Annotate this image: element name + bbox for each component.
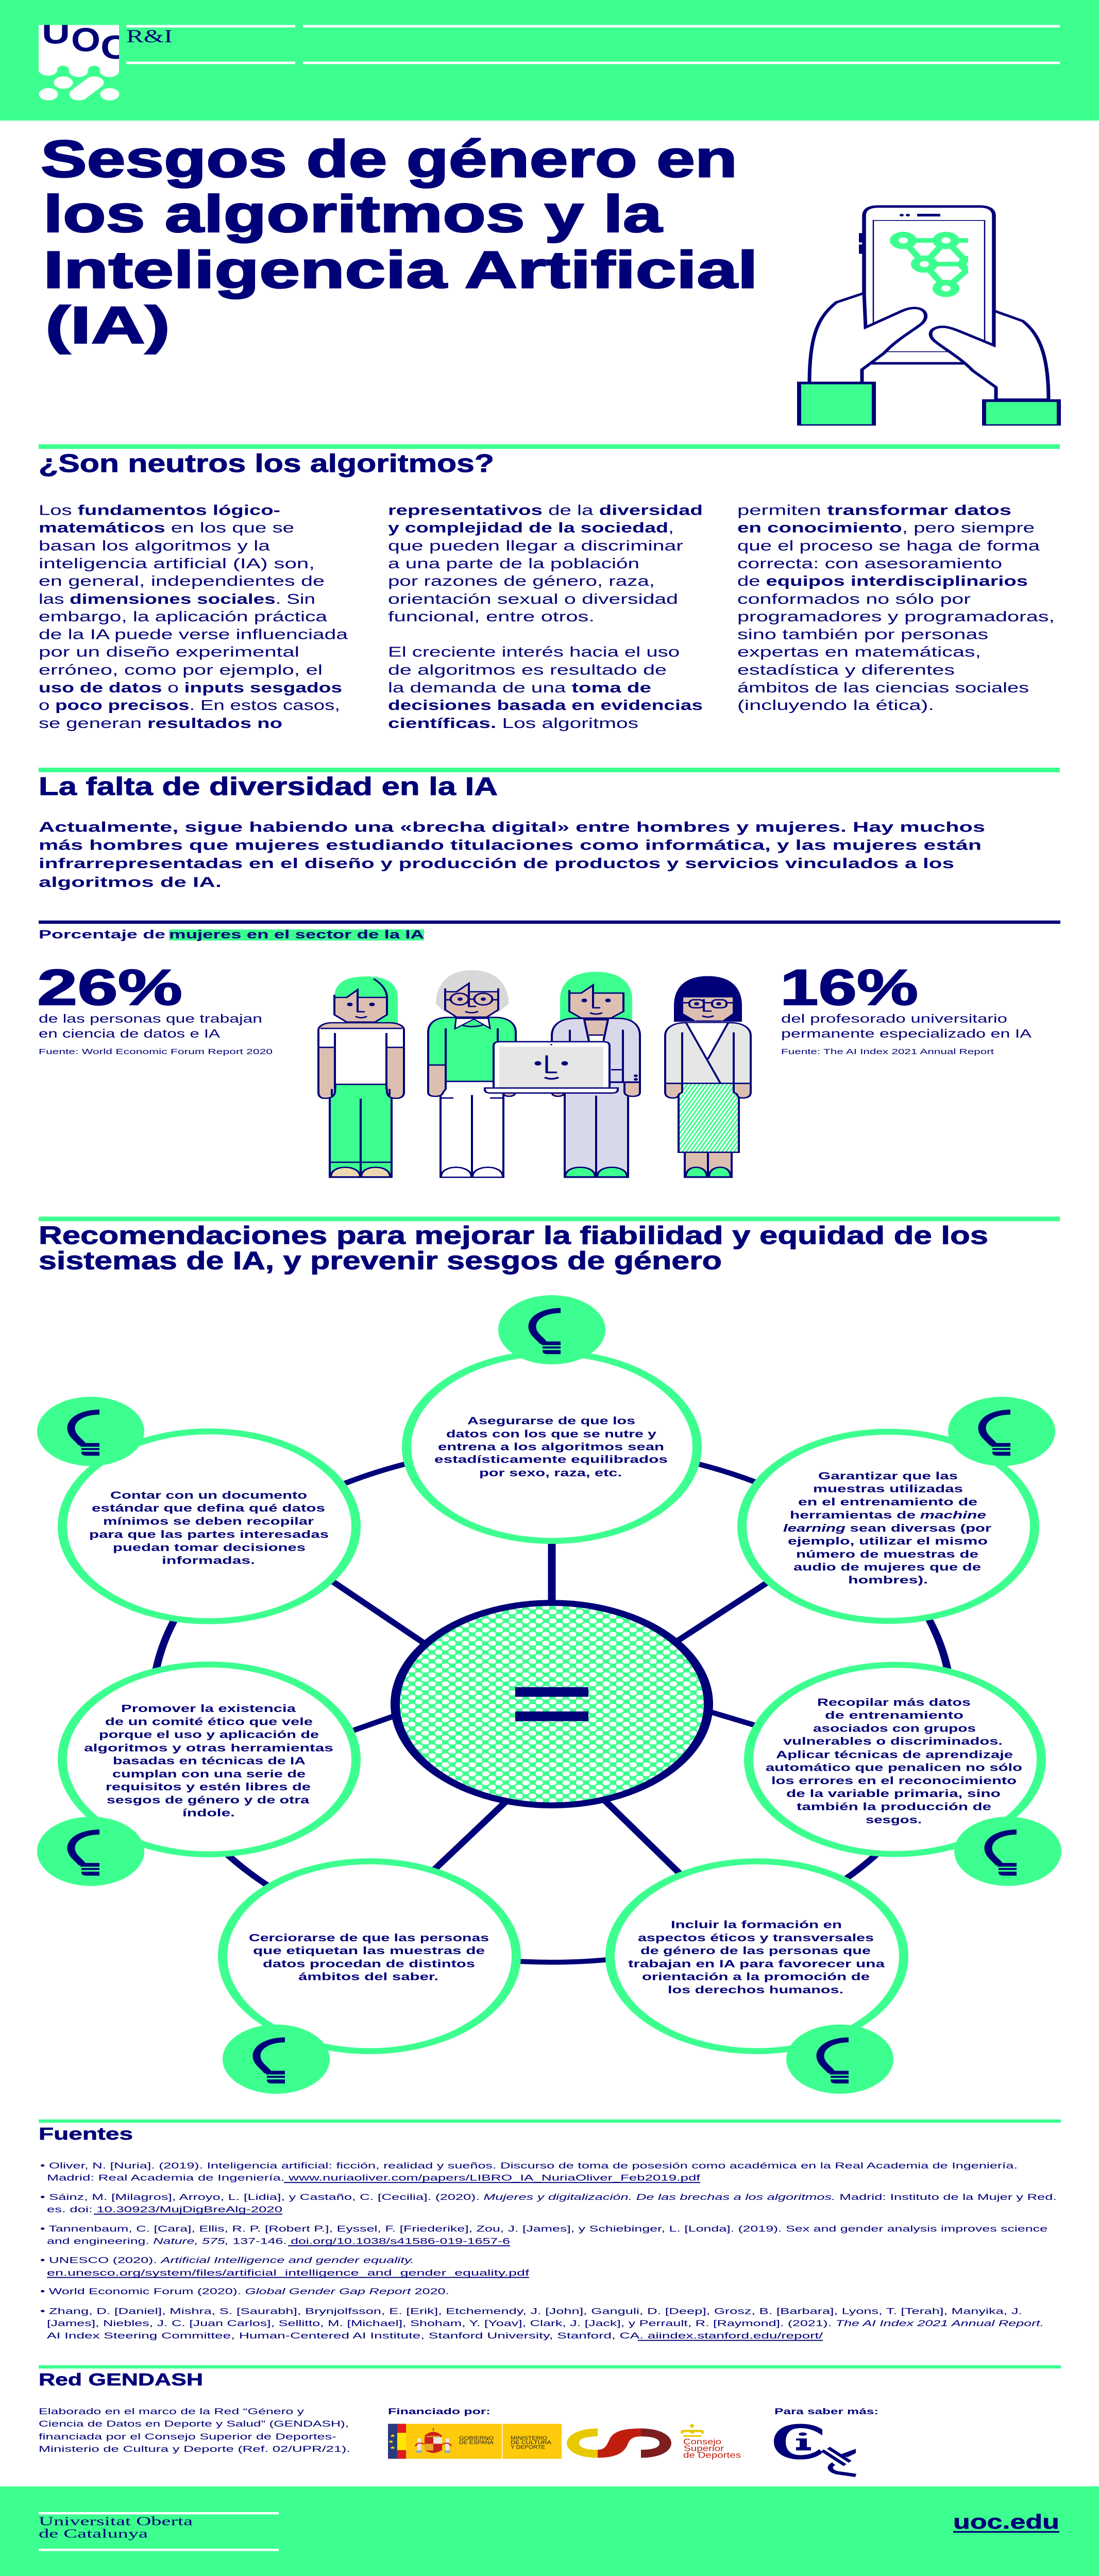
node: lower right: los errores en el reconocimiento [771, 1774, 1017, 1786]
subsection: porcentaje de mujeres: Porcentaje de [39, 928, 165, 941]
node: bottom right: orientación a la promoción de [642, 1971, 870, 1982]
lead paragraph [39, 819, 985, 890]
stat: 26% [37, 959, 273, 1056]
node: upper right: ejemplo, utilizar el mismo [788, 1535, 988, 1547]
description text: Ministerio de Cultura y Deporte (Ref. 02/UPR/21). [39, 2444, 350, 2454]
text column 3: en conocimiento, pero siempre [737, 519, 1035, 536]
text column 2: de algoritmos es resultado de [388, 662, 667, 678]
node: upper right: hombres). [848, 1574, 928, 1586]
text column 1 [39, 502, 348, 731]
node: upper left [62, 1431, 356, 1621]
text column 3: sino también por personas [737, 626, 988, 642]
footer rules [39, 2512, 279, 2551]
text column 1: de la IA puede verse influenciada [39, 626, 348, 642]
text column 3: permiten transformar datos [737, 502, 1011, 518]
logo: gobierno de españa: GOBIERNO [459, 2435, 494, 2441]
text column 3: expertas en matemáticas, [737, 643, 981, 660]
cuffs [799, 383, 874, 426]
node: upper right: muestras utilizadas [813, 1483, 963, 1495]
text column 3: programadores y programadoras, [737, 608, 1055, 624]
text column 1: las dimensiones sociales. Sin [39, 591, 315, 607]
node: lower right: de la variable primaria, sino [786, 1788, 1001, 1800]
description text: Ciencia de Datos en Deporte y Salud” (GENDASH), [39, 2418, 349, 2429]
node: lower right: también la producción de [797, 1801, 991, 1812]
node: upper right: audio de mujeres que de [793, 1561, 981, 1573]
reference list: es. doi: 10.30923/MujDigBreAlg-2020 [47, 2205, 282, 2214]
text column 1: o poco precisos. En estos casos, [39, 697, 340, 713]
subsection: porcentaje de mujeres [39, 921, 1060, 941]
reference list: • Tannenbaum, C. [Cara], Ellis, R. P. [Robert P.], Eyssel, F. [Friederike], Zou, J. [James], y Schiebinger, L. [Londa]. (2019). Sex and gender analysis improves science [40, 2225, 1047, 2233]
section: recomendaciones heading: sistemas de IA, y prevenir sesgos de género [39, 1246, 722, 1275]
logo: consejo superior de deportes: Superior [684, 2445, 724, 2453]
node: upper left: Contar con un documento [110, 1489, 307, 1501]
side buttons [859, 233, 865, 254]
node: bottom left [223, 1861, 516, 2051]
stat: 16%: Fuente: The AI Index 2021 Annual Report [781, 1047, 994, 1056]
icon: info search [774, 2424, 856, 2476]
node: bottom right: los derechos humanos. [668, 1984, 843, 1995]
stat: 26%: 26% [37, 959, 182, 1016]
node: upper right: en el entrenamiento de [798, 1496, 977, 1507]
node: bottom right: trabajan en IA para favorecer una [628, 1958, 885, 1970]
lead paragraph: infrarrepresentadas en el diseño y producción de productos y servicios vinculados a los [39, 855, 954, 871]
node: upper left: estándar que defina qué datos [92, 1502, 325, 1514]
node: lower left [62, 1665, 356, 1854]
stat: 16%: permanente especializado en IA [781, 1027, 1032, 1041]
text column 2: representativos de la diversidad [388, 502, 703, 518]
reference list: [James], Niebles, J. C. [Juan Carlos], Sellitto, M. [Michael], Shoham, Y. [Yoav], Clark, J. [Jack], y Perrault, R. [Raymond]. (2021). The AI Index 2021 Annual Report. [47, 2319, 1044, 2328]
header band [0, 0, 1099, 121]
website link: uoc.edu [953, 2511, 1059, 2533]
node: bottom left: datos procedan de distintos [263, 1958, 475, 1970]
heading: Fuentes [39, 2124, 133, 2144]
icon: bulb lower left [37, 1817, 144, 1886]
node: top: datos con los que se nutre y [446, 1428, 656, 1440]
person 4 [665, 976, 751, 1177]
central circle with equal sign [395, 1603, 708, 1805]
lead paragraph: algoritmos de IA. [39, 874, 222, 890]
person 3 [552, 972, 640, 1177]
node: lower left: de un comité ético que vele [105, 1716, 313, 1727]
description text [39, 2406, 350, 2454]
node: lower left: índole. [182, 1807, 235, 1819]
text column 2 [388, 502, 703, 731]
node: lower left: algoritmos y otras herramientas [84, 1742, 333, 1754]
coat of arms [415, 2428, 451, 2453]
right hand [931, 311, 1049, 400]
logo: consejo superior de deportes: Consejo [683, 2438, 721, 2447]
title: (IA) [45, 296, 170, 354]
title: Inteligencia Artificial [43, 241, 758, 299]
node: upper left: puedan tomar decisiones [113, 1541, 306, 1553]
UOC logo: U [42, 13, 70, 50]
node: top [407, 1353, 697, 1541]
text column 3: conformados no sólo por [737, 591, 971, 607]
text column 1: inteligencia artificial (IA) son, [39, 555, 315, 571]
reference list: • Zhang, D. [Daniel], Mishra, S. [Saurabh], Brynjolfsson, E. [Erik], Etchemendy, J. [John], Ganguli, D. [Deep], Grosz, B. [Barbara], Lyons, T. [Terah], Manyika, J. [40, 2307, 1022, 2316]
footer band [0, 2486, 1099, 2576]
reference list: Madrid: Real Academia de Ingeniería. www.nuriaoliver.com/papers/LIBRO_IA_NuriaOliver_Feb2019.pdf [47, 2174, 700, 2183]
reference list: and engineering. Nature, 575, 137-146. doi.org/10.1038/s41586-019-1657-6 [47, 2237, 510, 2246]
heading: ¿Son neutros los algoritmos? [39, 449, 494, 478]
node: upper left: para que las partes interesadas [89, 1529, 329, 1540]
text column 3: (incluyendo la ética). [737, 697, 934, 713]
university name: de Catalunya [39, 2526, 148, 2540]
node: lower right: Aplicar técnicas de aprendizaje [776, 1749, 1013, 1760]
text column 2: la demanda de una toma de [388, 680, 651, 696]
person 1 [318, 976, 404, 1177]
text column 2: a una parte de la población [388, 555, 639, 571]
node: upper left: informadas. [162, 1554, 255, 1566]
stat: 16%: 16% [780, 959, 918, 1016]
reference list: • World Economic Forum (2020). Global Gender Gap Report 2020. [40, 2287, 449, 2296]
text column 1: en general, independientes de [39, 573, 325, 589]
stat: 26%: Fuente: World Economic Forum Report 2020 [39, 1047, 273, 1056]
text column 3: estadística y diferentes [737, 662, 955, 678]
reference list: • Sáinz, M. [Milagros], Arroyo, L. [Lidia], y Castaño, C. [Cecilia]. (2020). Mujeres y digitalización. De las brechas a los algoritmos. Madrid: Instituto de la Mujer y Red. [40, 2193, 1057, 2202]
radial diagram: recommendations [37, 1295, 1061, 2094]
logo: consejo superior de deportes [567, 2424, 741, 2460]
phone body [864, 207, 994, 363]
node: lower left: requisitos y estén libres de [106, 1781, 311, 1793]
text column 2: El creciente interés hacia el uso [388, 643, 680, 660]
description text: financiada por el Consejo Superior de Deportes- [39, 2432, 336, 2442]
node: top: Asegurarse de que los [467, 1415, 635, 1427]
logo: consejo superior de deportes: de Deportes [683, 2451, 741, 2460]
node: lower right: vulnerables o discriminados. [783, 1735, 1003, 1747]
logo: gobierno de españa: MINISTERIO [511, 2435, 547, 2441]
logo: gobierno de españa [388, 2424, 562, 2459]
text column 1: por un diseño experimental [39, 643, 299, 660]
text column 1: Los fundamentos lógico- [39, 502, 280, 518]
node: bottom left: ámbitos del saber. [298, 1971, 438, 1982]
text column 1: uso de datos o inputs sesgados [39, 680, 342, 696]
university name [39, 2514, 193, 2540]
stat: 26%: de las personas que trabajan [39, 1012, 262, 1026]
reference list: • UNESCO (2020). Artificial Intelligence and gender equality. [40, 2256, 414, 2265]
section: fuentes [39, 2120, 1061, 2341]
section: falta de diversidad [39, 768, 1060, 890]
left hand [809, 293, 926, 383]
R&I label: R&I [126, 26, 173, 47]
reference list: • Oliver, N. [Nuria]. (2019). Inteligencia artificial: ficción, realidad y sueños. Discurso de toma de posesión como académica en la Real Academia de Ingeniería. [40, 2161, 1018, 2171]
section: red gendash [39, 2365, 1061, 2476]
label: financiado por: Financiado por: [388, 2406, 491, 2416]
node: lower right: Recopilar más datos [817, 1696, 971, 1708]
stat: 16%: del profesorado universitario [781, 1012, 1007, 1026]
text column 1: matemáticos en los que se [39, 519, 294, 536]
text column 3 [737, 502, 1055, 713]
UOC logo: C [100, 28, 129, 66]
spokes [319, 1532, 781, 1884]
text column 2: y complejidad de la sociedad, [388, 519, 674, 536]
logo: gobierno de españa: DE ESPAÑA [459, 2440, 494, 2445]
text column 2: orientación sexual o diversidad [388, 591, 678, 607]
lead paragraph: Actualmente, sigue habiendo una «brecha digital» entre hombres y mujeres. Hay muchos [39, 819, 985, 835]
reference list: AI Index Steering Committee, Human-Centered AI Institute, Stanford University, Stanford, CA. aiindex.stanford.edu/report/ [47, 2331, 823, 2341]
icon: bulb upper left [37, 1397, 144, 1466]
title: Sesgos de género en [41, 130, 737, 189]
text column 1: se generan resultados no [39, 715, 282, 731]
node: lower right: asociados con grupos [813, 1722, 976, 1734]
title [41, 130, 758, 354]
header rules [126, 25, 1060, 64]
node: upper left: mínimos se deben recopilar [103, 1515, 314, 1527]
node: lower left: porque el uso y aplicación de [99, 1728, 319, 1740]
reference list: en.unesco.org/system/files/artificial_intelligence_and_gender_equality.pdf [47, 2268, 529, 2278]
icon: bulb top [498, 1295, 605, 1364]
node: lower left: sesgos de género y de otra [107, 1794, 310, 1806]
section: recomendaciones heading [39, 1216, 1060, 1275]
network icon [894, 234, 980, 294]
text column 2: por razones de género, raza, [388, 573, 655, 589]
text column 2: decisiones basada en evidencias [388, 697, 703, 713]
UOC logo: O [71, 21, 100, 58]
node: bottom right: Incluir la formación en [671, 1919, 842, 1930]
icon: bulb upper right [948, 1397, 1055, 1466]
lead paragraph: más hombres que mujeres estudiando titulaciones como informática, y las mujeres están [39, 837, 982, 853]
node: lower right: sesgos. [866, 1814, 922, 1826]
node: top: por sexo, raza, etc. [479, 1467, 622, 1479]
node: upper right: número de muestras de [796, 1548, 978, 1560]
icon: bulb bottom right [786, 2025, 893, 2094]
person 2 [428, 970, 516, 1177]
icon: bulb bottom left [223, 2025, 330, 2094]
label: para saber mas: Para saber más: [774, 2406, 878, 2416]
text column 3: que el proceso se haga de forma [737, 537, 1040, 554]
logo: gobierno de españa: DE CULTURA [511, 2440, 552, 2445]
node: upper right [742, 1432, 1035, 1621]
text column 2: que pueden llegar a discriminar [388, 537, 683, 554]
node: bottom right [610, 1861, 904, 2051]
text column 3: ámbitos de las ciencias sociales [737, 680, 1029, 696]
node: lower left: basadas en técnicas de IA [113, 1755, 306, 1767]
node: lower left: cumplan con una serie de [112, 1768, 306, 1780]
stat: 16% [780, 959, 1032, 1056]
laptop [485, 1042, 618, 1093]
text column 1: basan los algoritmos y la [39, 537, 270, 554]
heading: La falta de diversidad en la IA [39, 772, 498, 801]
node: upper right: herramientas de machine [790, 1509, 986, 1521]
section: son neutros [39, 444, 1060, 731]
node: lower left: Promover la existencia [121, 1703, 296, 1715]
node: lower right [749, 1665, 1041, 1854]
text column 2: funcional, entre otros. [388, 608, 595, 624]
text column 3: correcta: con asesoramiento [737, 555, 1002, 571]
node: upper right: learning sean diversas (por [783, 1522, 992, 1534]
UOC logo [39, 25, 120, 100]
node: top: estadísticamente equilibrados [434, 1453, 668, 1465]
node: bottom left: que etiquetan las muestras de [253, 1945, 485, 1957]
node: top: entrena a los algoritmos sean [438, 1441, 664, 1453]
text column 1: erróneo, como por ejemplo, el [39, 662, 323, 678]
university name: Universitat Oberta [39, 2514, 193, 2528]
icon: hands holding phone [793, 207, 1064, 428]
title: los algoritmos y la [43, 185, 663, 243]
description text: Elaborado en el marco de la Red “Género y [39, 2406, 304, 2416]
icon: bulb lower right [954, 1817, 1061, 1886]
subsection: porcentaje de mujeres: mujeres en el sector de la IA [169, 928, 424, 941]
connecting ring [153, 1446, 951, 1962]
stat: 26%: en ciencia de datos e IA [39, 1027, 221, 1041]
node: bottom left: Cerciorarse de que las personas [249, 1932, 489, 1944]
text column 1: embargo, la aplicación práctica [39, 608, 328, 624]
logo: gobierno de españa: Y DEPORTE [511, 2445, 545, 2450]
node: bottom right: de género de las personas que [640, 1945, 871, 1957]
node: bottom right: aspectos éticos y transversales [638, 1932, 874, 1944]
node: lower right: automático que penalicen no sólo [766, 1761, 1022, 1773]
text column 2: científicas. Los algoritmos [388, 715, 638, 731]
node: lower right: de entrenamiento [825, 1709, 963, 1721]
node: upper right: Garantizar que las [818, 1470, 958, 1482]
illustration: four women with laptop [318, 970, 751, 1177]
text column 3: de equipos interdisciplinarios [737, 573, 1028, 589]
reference list [40, 2161, 1057, 2341]
heading: Red GENDASH [39, 2370, 203, 2389]
